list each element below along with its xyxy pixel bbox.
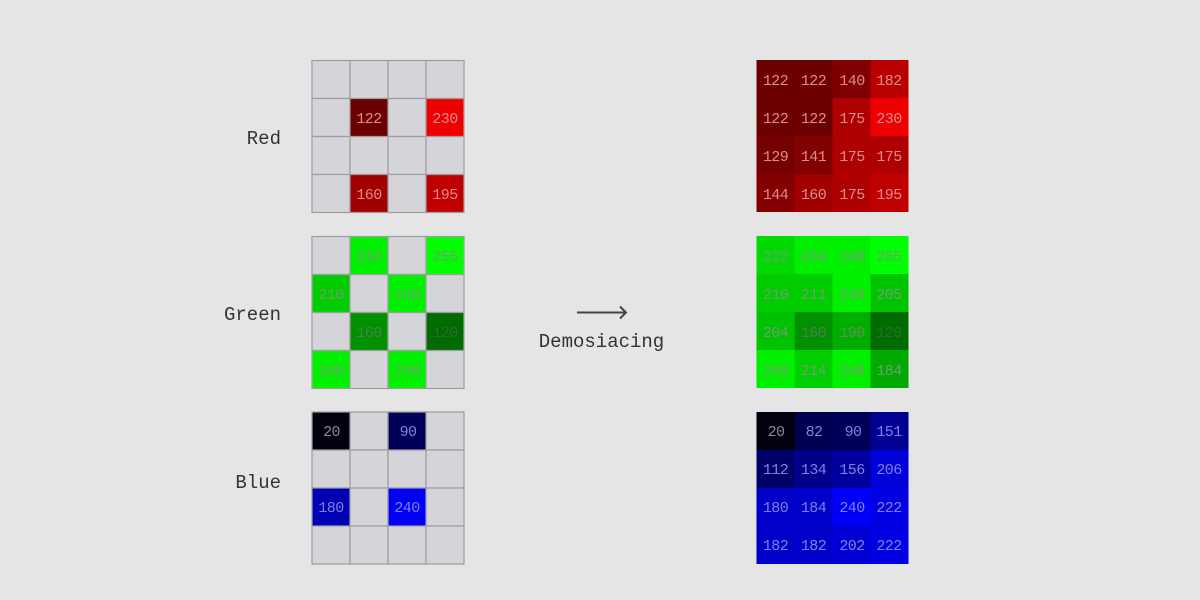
panel: blue interpolated grid: 151 [876, 424, 902, 441]
panel: blue sensor grid: 20 [323, 424, 340, 441]
panel: blue interpolated grid: 206 [876, 462, 902, 479]
panel: green sensor grid: 120 [432, 325, 458, 342]
panel: blue interpolated grid: 180 [763, 500, 789, 517]
panel: green interpolated grid: 222 [763, 249, 788, 266]
panel: red interpolated grid: 122 [763, 73, 788, 90]
panel: green sensor grid: 160 [356, 325, 382, 342]
panel: blue interpolated grid: 82 [806, 424, 822, 441]
panel: blue interpolated grid: 222 [876, 500, 902, 517]
panel: green interpolated grid: 190 [839, 325, 865, 342]
panel: green interpolated grid: 204 [763, 325, 789, 342]
panel: green interpolated grid: 214 [801, 363, 827, 380]
panel: blue sensor grid: 240 [394, 500, 420, 517]
panel: blue interpolated grid: 240 [839, 500, 865, 517]
panel: red interpolated grid: 160 [801, 187, 827, 204]
panel: blue interpolated grid: 20 [768, 424, 785, 441]
label: Blue: Blue [235, 472, 281, 494]
panel: blue interpolated grid: 182 [763, 538, 788, 555]
panel: blue interpolated grid: 112 [763, 462, 788, 479]
panel: red sensor grid: 160 [356, 187, 382, 204]
panel: green sensor grid: 234 [356, 249, 382, 266]
panel: blue interpolated grid: 222 [876, 538, 902, 555]
panel: green interpolated grid: 205 [876, 287, 902, 304]
panel: red sensor grid: 122 [356, 111, 382, 128]
panel: green interpolated grid: 120 [876, 325, 902, 342]
panel: green sensor grid: 240 [394, 363, 420, 380]
label: Green: Green [224, 304, 281, 326]
panel: green interpolated grid: 240 [763, 363, 789, 380]
panel: green sensor grid [312, 236, 464, 388]
panel: blue interpolated grid: 90 [845, 424, 862, 441]
panel: red interpolated grid: 175 [839, 111, 865, 128]
panel: red interpolated grid: 175 [839, 149, 865, 166]
panel: red sensor grid [312, 60, 464, 212]
panel: red interpolated grid: 122 [801, 73, 826, 90]
arrow: demosaicing direction [577, 306, 626, 318]
panel: red interpolated grid: 195 [876, 187, 902, 204]
panel: green sensor grid: 255 [432, 249, 458, 266]
panel: green sensor grid: 240 [394, 287, 420, 304]
panel: red sensor grid: 195 [432, 187, 458, 204]
panel: red sensor grid: 230 [432, 111, 458, 128]
panel: blue interpolated grid: 184 [801, 500, 827, 517]
panel: green interpolated grid: 240 [839, 249, 865, 266]
panel: red interpolated grid: 144 [763, 187, 789, 204]
label: Demosiacing: Demosiacing [539, 331, 664, 353]
panel: red interpolated grid: 230 [876, 111, 902, 128]
panel: red interpolated grid: 129 [763, 149, 788, 166]
panel: blue sensor grid [312, 412, 464, 564]
panel: green interpolated grid: 240 [839, 287, 865, 304]
panel: red interpolated grid: 140 [839, 73, 865, 90]
panel: red interpolated grid [756, 60, 908, 212]
panel: green interpolated grid: 255 [876, 249, 902, 266]
panel: blue interpolated grid [756, 412, 908, 564]
panel: red interpolated grid: 122 [801, 111, 826, 128]
panel: blue interpolated grid: 156 [839, 462, 865, 479]
panel: green interpolated grid: 234 [801, 249, 827, 266]
panel: green sensor grid: 210 [318, 287, 344, 304]
panel: red interpolated grid: 182 [876, 73, 902, 90]
panel: blue interpolated grid: 134 [801, 462, 827, 479]
panel: green interpolated grid: 210 [763, 287, 789, 304]
panel: red interpolated grid: 175 [839, 187, 865, 204]
panel: green interpolated grid [756, 236, 908, 388]
panel: green interpolated grid: 240 [839, 363, 865, 380]
panel: blue sensor grid: 90 [400, 424, 417, 441]
panel: red interpolated grid: 122 [763, 111, 788, 128]
panel: green interpolated grid: 211 [801, 287, 827, 304]
panel: blue interpolated grid: 182 [801, 538, 826, 555]
panel: blue sensor grid: 180 [318, 500, 344, 517]
panel: red interpolated grid: 175 [876, 149, 902, 166]
panel: red interpolated grid: 141 [801, 149, 827, 166]
panel: green interpolated grid: 184 [876, 363, 902, 380]
panel: green interpolated grid: 160 [801, 325, 827, 342]
panel: blue interpolated grid: 202 [839, 538, 865, 555]
panel: green sensor grid: 240 [318, 363, 344, 380]
label: Red: Red [247, 128, 281, 150]
